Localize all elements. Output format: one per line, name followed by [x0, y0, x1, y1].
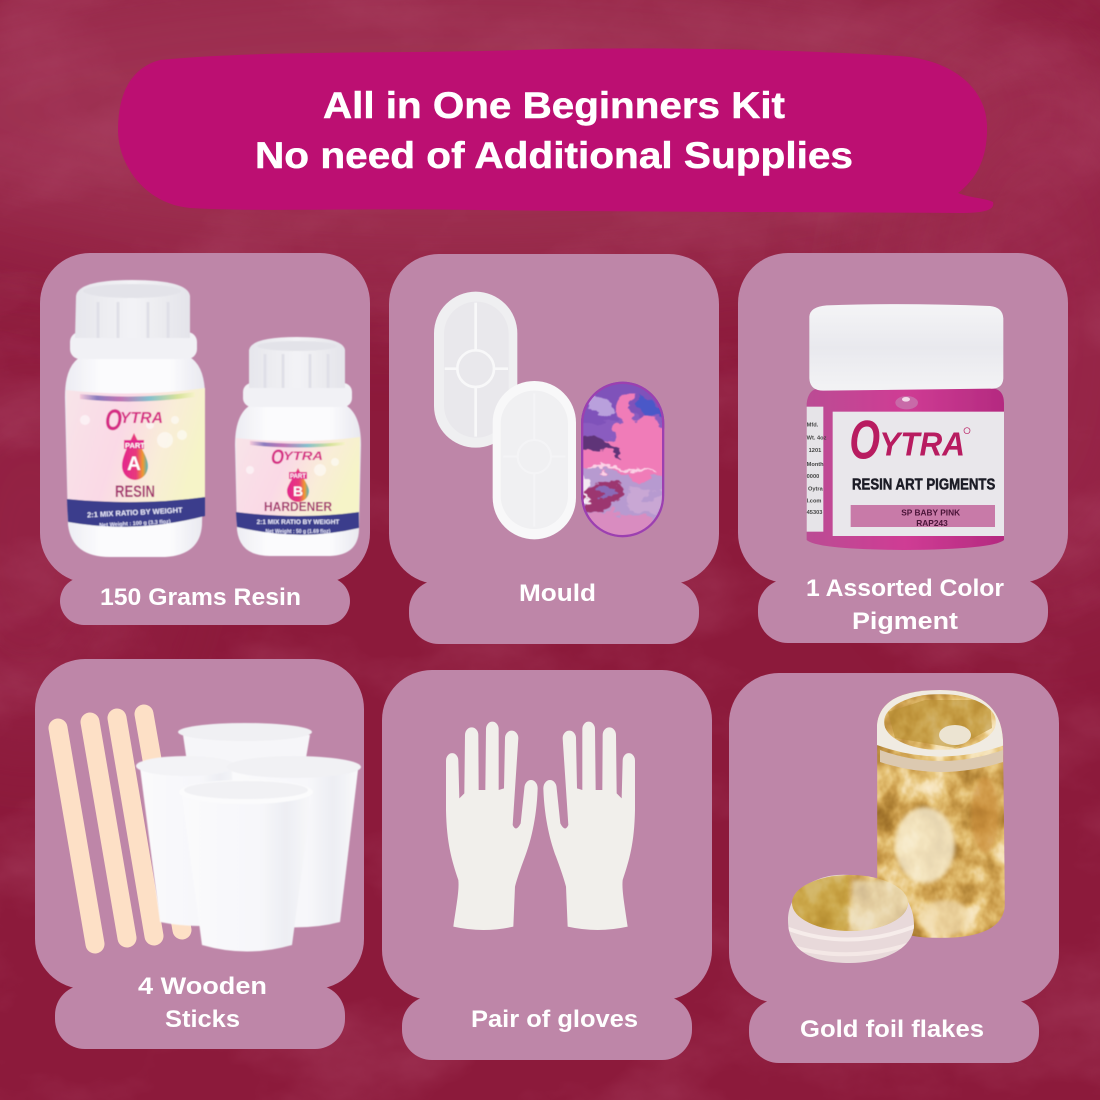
- icon: hardener bottle B: YTRA: [283, 449, 323, 463]
- icon: resin bottle A: [65, 280, 205, 557]
- icon: resin bottle A: 2:1 MIX RATIO BY WEIGHT: [87, 505, 183, 519]
- icon: resin bottle A: A: [127, 454, 141, 475]
- label: 150 Grams Resin: [100, 584, 301, 611]
- front label: O: [849, 408, 880, 470]
- label pill: [60, 577, 350, 625]
- label: Sticks: [165, 1006, 240, 1033]
- panel: mould: [389, 254, 719, 644]
- title banner: [118, 48, 993, 213]
- panel: colour pigment: [738, 253, 1068, 643]
- icon: pigment jar: [807, 304, 1004, 550]
- side label: l.com: [807, 499, 821, 505]
- label pill: [749, 999, 1039, 1063]
- front label: RAP243: [916, 518, 948, 528]
- label pill: [409, 580, 699, 644]
- label: Mould: [519, 580, 596, 607]
- side label: 0000: [807, 474, 819, 480]
- label: 1 Assorted Color: [806, 575, 1004, 602]
- side label: Mfd.: [807, 423, 819, 429]
- icon: hardener bottle B: HARDENER: [264, 499, 333, 514]
- side label: [807, 407, 827, 532]
- label: Gold foil flakes: [800, 1016, 984, 1043]
- panel card: [35, 659, 364, 989]
- title text: All in One Beginners Kit: [323, 85, 785, 126]
- icon: resin bottle A: O: [105, 404, 122, 437]
- side label: Oytra: [808, 487, 824, 493]
- panel card: [729, 673, 1059, 1003]
- banner brush shape: [118, 48, 993, 213]
- panel card: [389, 254, 719, 584]
- icon: wooden sticks: [58, 714, 182, 944]
- icon: resin bottle A: RESIN: [115, 482, 155, 501]
- front label: YTRA: [879, 427, 965, 464]
- panel card: [382, 670, 712, 1000]
- icon: gold flake jar: [877, 690, 1005, 938]
- panel: gloves: [382, 670, 712, 1060]
- panel: 150 grams resin: [40, 253, 370, 625]
- panel card: [738, 253, 1068, 583]
- icon: silicone moulds and marble tray: [434, 292, 664, 540]
- label: 4 Wooden: [138, 973, 267, 1000]
- front mould: [493, 381, 576, 539]
- icon: resin bottle A: Net Weight : 100 g (3.3 floz): [99, 519, 171, 529]
- marble tray: [581, 382, 664, 538]
- back mould: [434, 292, 517, 448]
- icon: hardener bottle B: O: [271, 446, 284, 469]
- icon: hardener bottle B: Net Weight : 50 g (1.69 floz): [266, 529, 331, 535]
- icon: hardener bottle B: PART: [290, 474, 306, 480]
- front label: [833, 408, 1004, 536]
- icon: paper cups: [136, 723, 361, 952]
- icon: pair of gloves: [446, 722, 635, 930]
- label: [806, 575, 1004, 635]
- icon: resin bottle A: YTRA: [120, 410, 163, 427]
- icon: hardener bottle B: 2:1 MIX RATIO BY WEIGHT: [257, 519, 339, 526]
- label pill: [55, 985, 345, 1049]
- front label: SP BABY PINK: [901, 507, 960, 517]
- icon: resin bottle A: PART: [125, 441, 145, 450]
- icon: hardener bottle B: B: [293, 483, 303, 499]
- front label: RESIN ART PIGMENTS: [852, 476, 995, 493]
- title text: [255, 85, 853, 176]
- icon: gold flake dish: [788, 874, 914, 963]
- title text: No need of Additional Supplies: [255, 135, 853, 176]
- panel: wooden sticks and cups: [35, 659, 364, 1049]
- label pill: [402, 996, 692, 1060]
- label: [138, 973, 267, 1033]
- panel: gold foil flakes: [729, 673, 1059, 1063]
- side label: 1201: [809, 448, 821, 454]
- icon: hardener bottle B: [235, 337, 361, 556]
- side label: Wt. 4oz: [807, 435, 827, 441]
- label: Pair of gloves: [471, 1006, 638, 1033]
- label pill: [758, 579, 1048, 643]
- side label: Month: [807, 462, 824, 468]
- side label: 45303: [807, 510, 822, 516]
- panel card: [40, 253, 370, 583]
- label: Pigment: [852, 608, 958, 635]
